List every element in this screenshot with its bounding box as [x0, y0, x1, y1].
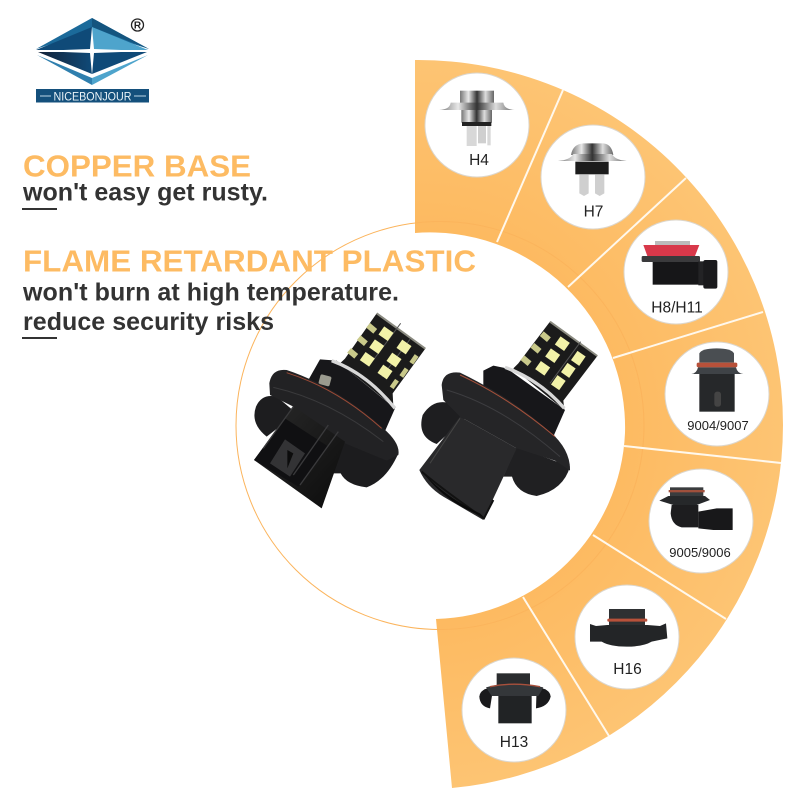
circle icon: 9005/9006 — [649, 469, 753, 573]
logo: NICEBONJOUR — [36, 18, 149, 104]
panel: orange segmented ring — [236, 60, 783, 788]
circle icon: H7 — [541, 125, 645, 229]
circle icon: 9004/9007 — [665, 342, 769, 446]
bulb: H7 socket — [558, 143, 627, 196]
label: H4: H4 — [469, 152, 489, 169]
text: won't easy get rusty: won't easy get rusty. — [22, 178, 268, 206]
label: H16: H16 — [613, 661, 642, 678]
product photo: left bulb — [254, 313, 425, 508]
circle icon: H16 — [575, 585, 679, 689]
bulb: H16 socket — [590, 609, 667, 647]
text: won't burn at high temperature: won't burn at high temperature. — [22, 278, 399, 306]
label: H7: H7 — [584, 204, 603, 220]
bulb: 9005 socket — [659, 487, 733, 530]
circle icon: H4 — [425, 73, 529, 177]
heading: copper base: COPPER BASE — [23, 148, 251, 184]
product photo: right bulb — [419, 322, 597, 520]
label: H13: H13 — [500, 734, 528, 751]
label: H8/H11: H8/H11 — [651, 300, 703, 316]
label: 9004/9007: 9004/9007 — [687, 418, 749, 433]
logo name bar: NICEBONJOUR — [54, 92, 132, 104]
circle icon: H13 — [462, 658, 566, 762]
underline 1 — [22, 208, 57, 210]
circle icon: H8/H11 — [624, 220, 728, 324]
bulb: H4 socket — [439, 91, 515, 146]
heading: flame retardant plastic: FLAME RETARDANT PLASTIC — [23, 244, 476, 278]
bulb: H13 socket — [479, 673, 551, 723]
bulb: 9004 socket — [691, 348, 743, 412]
underline 2 — [22, 337, 57, 339]
text: reduce security risks: reduce security risks — [23, 308, 274, 336]
registered mark: R — [134, 20, 142, 32]
bulb: H8 socket — [642, 241, 717, 289]
label: 9005/9006: 9005/9006 — [669, 545, 731, 560]
